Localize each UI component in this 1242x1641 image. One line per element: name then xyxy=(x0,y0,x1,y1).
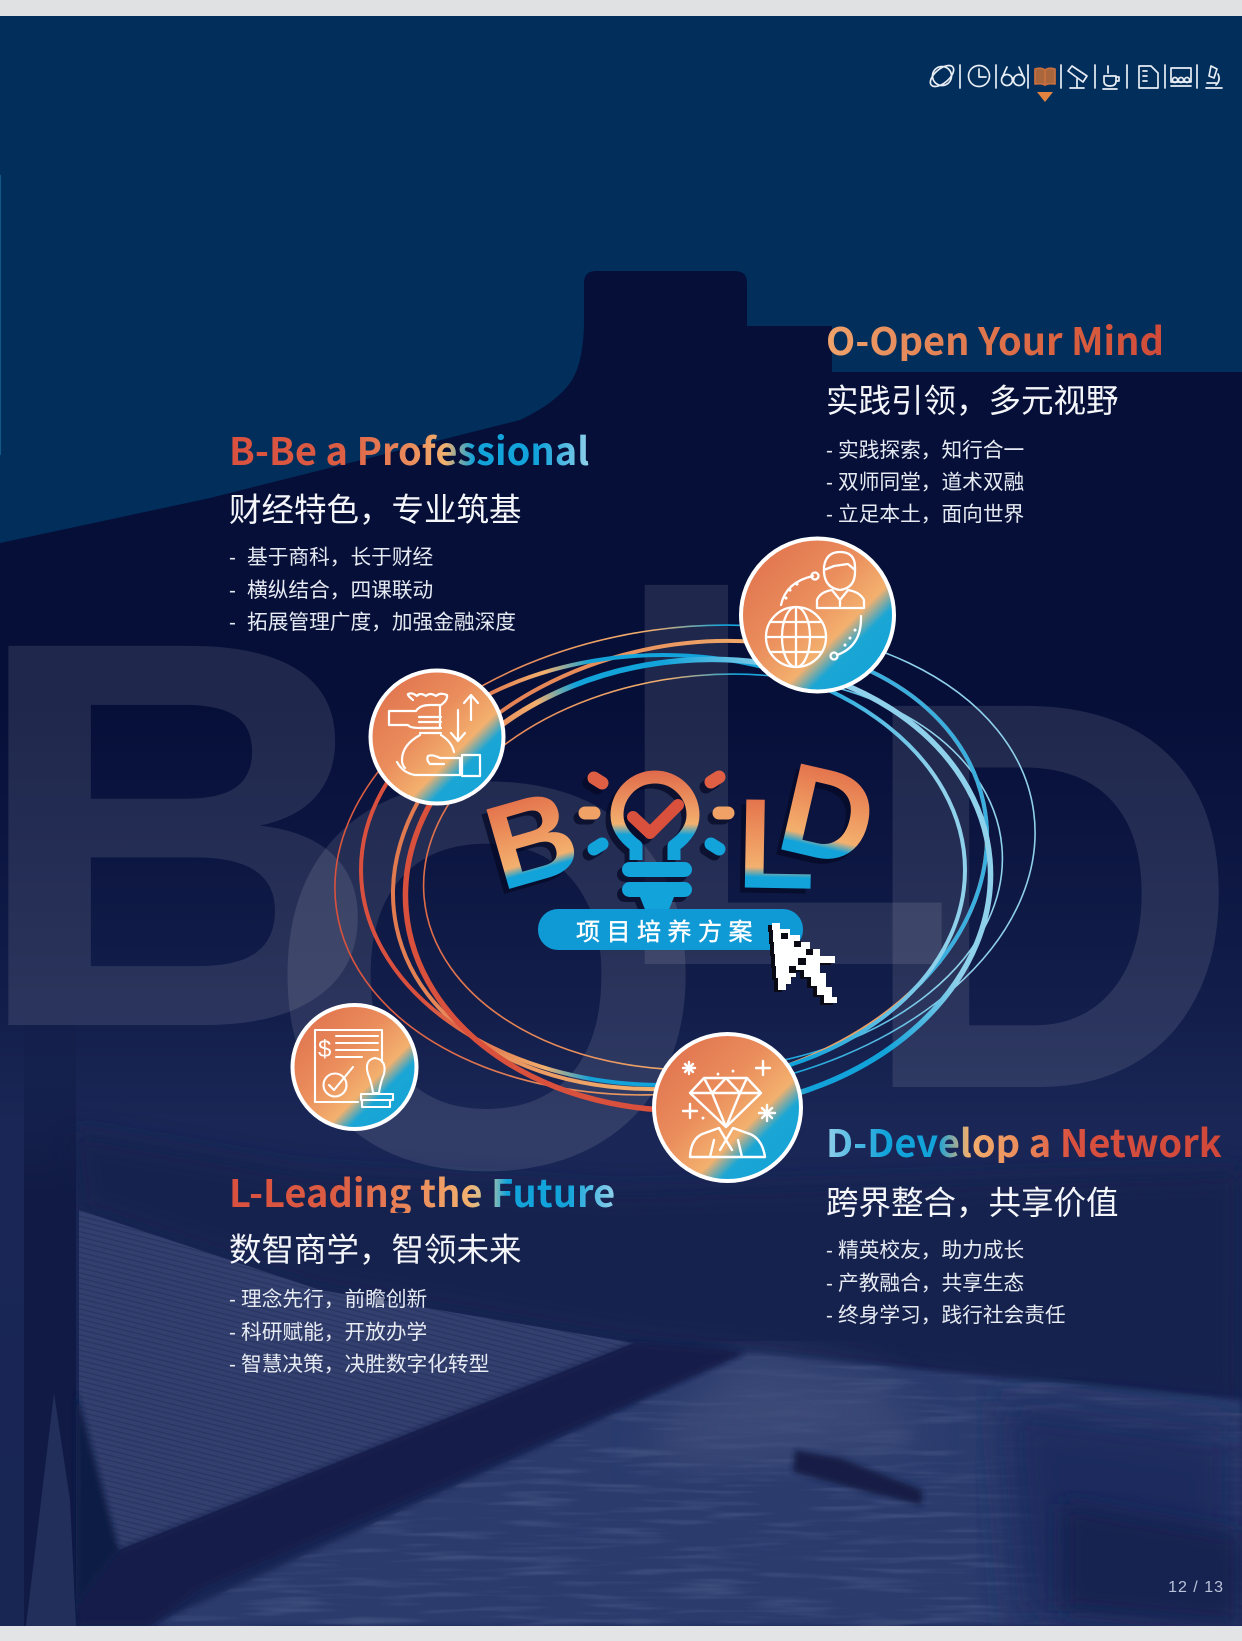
bullet list: - xyxy=(826,1272,833,1295)
photo: river and bridge xyxy=(24,1106,1242,1626)
icon: telescope xyxy=(1068,66,1087,88)
subheading: 实践引领，多元视野 xyxy=(826,383,1119,419)
icon disc: Leading the Future: $ xyxy=(318,1036,331,1063)
icon disc: Open Your Mind xyxy=(741,538,894,692)
heading: O-Open Your Mind xyxy=(826,311,1164,366)
page number: 12 / 13 xyxy=(1168,1579,1224,1596)
icon: pixel cursor xyxy=(768,923,837,1005)
panel: D - Develop a Network xyxy=(826,1113,1222,1327)
central logo: BOLD light bulb xyxy=(472,735,889,917)
orbit rings xyxy=(304,581,1066,1143)
bullet list xyxy=(826,1239,1066,1327)
panel: O - Open Your Mind xyxy=(826,311,1164,526)
bullet list: 终身学习，践行社会责任 xyxy=(838,1304,1066,1327)
icon: microscope xyxy=(1206,66,1222,88)
bullet list: - xyxy=(826,1304,833,1327)
ghost letters: BOLD xyxy=(0,466,1241,1284)
bullet list: 立足本土，面向世界 xyxy=(838,503,1024,526)
icon: coffee cup xyxy=(1103,66,1119,89)
bullet list: - xyxy=(229,579,236,602)
bullet list: 科研赋能，开放办学 xyxy=(241,1321,427,1344)
bulb xyxy=(617,777,693,912)
bullet list: - xyxy=(826,1239,833,1262)
icon disc: Develop a Network xyxy=(654,1034,801,1181)
bullet list: - xyxy=(826,471,833,494)
bullet list: - xyxy=(229,1353,236,1376)
bullet list: - xyxy=(229,546,236,569)
heading: D-Develop a Network xyxy=(826,1113,1222,1168)
bullet list: - xyxy=(229,611,236,634)
icon: book (current section) xyxy=(1035,68,1055,85)
icon: seats xyxy=(1171,68,1191,86)
icon disc: Be a Professional xyxy=(370,670,504,804)
icon: clock xyxy=(968,66,990,86)
pill label xyxy=(538,909,803,950)
bullet list: 基于商科，长于财经 xyxy=(247,546,433,569)
bullet list: 拓展管理广度，加强金融深度 xyxy=(247,611,516,634)
ghost letters: BOLD: O xyxy=(264,668,710,1284)
icon: document xyxy=(1139,66,1158,88)
top browser strip xyxy=(0,0,1242,16)
ghost letters: BOLD: D xyxy=(857,586,1241,1205)
icon: glasses xyxy=(1002,67,1024,86)
bulb rays xyxy=(585,777,728,849)
bullet list: 精英校友，助力成长 xyxy=(838,1239,1024,1262)
logo letter L: L xyxy=(736,772,816,917)
bullet list: - xyxy=(229,1288,236,1311)
heading: L-Leading the Future xyxy=(229,1163,615,1218)
heading: B-Be a Professional xyxy=(229,421,589,476)
panel: L - Leading the Future xyxy=(229,1163,615,1376)
bullet list xyxy=(826,439,1024,526)
bullet list: 实践探索，知行合一 xyxy=(838,439,1024,462)
bullet list: - xyxy=(826,439,833,462)
marker triangle xyxy=(1037,92,1053,102)
logo letter B: B xyxy=(472,763,592,916)
bullet list: 智慧决策，决胜数字化转型 xyxy=(241,1353,489,1376)
panel: B - Be a Professional xyxy=(229,421,589,634)
pill label: 项目培养方案 xyxy=(576,919,759,946)
bullet list: 双师同堂，道术双融 xyxy=(838,471,1024,494)
bottom browser strip xyxy=(0,1626,1242,1641)
ghost letters: BOLD: L xyxy=(606,466,959,1081)
bullet list: 横纵结合，四课联动 xyxy=(247,579,433,602)
bullet list: 产教融合，共享生态 xyxy=(838,1272,1024,1295)
navigation icon row xyxy=(930,64,1223,102)
bullet list: - xyxy=(826,503,833,526)
logo letter D: D xyxy=(767,735,889,896)
icon disc: Leading the Future xyxy=(292,1005,416,1129)
subheading: 财经特色，专业筑基 xyxy=(229,492,522,528)
subheading: 跨界整合，共享价值 xyxy=(826,1185,1119,1221)
bullet list xyxy=(229,546,516,634)
subheading: 数智商学，智领未来 xyxy=(229,1232,522,1268)
bullet list: - xyxy=(229,1321,236,1344)
bullet list xyxy=(229,1288,489,1376)
bullet list: 理念先行，前瞻创新 xyxy=(241,1288,427,1311)
icon: planet xyxy=(927,62,957,90)
